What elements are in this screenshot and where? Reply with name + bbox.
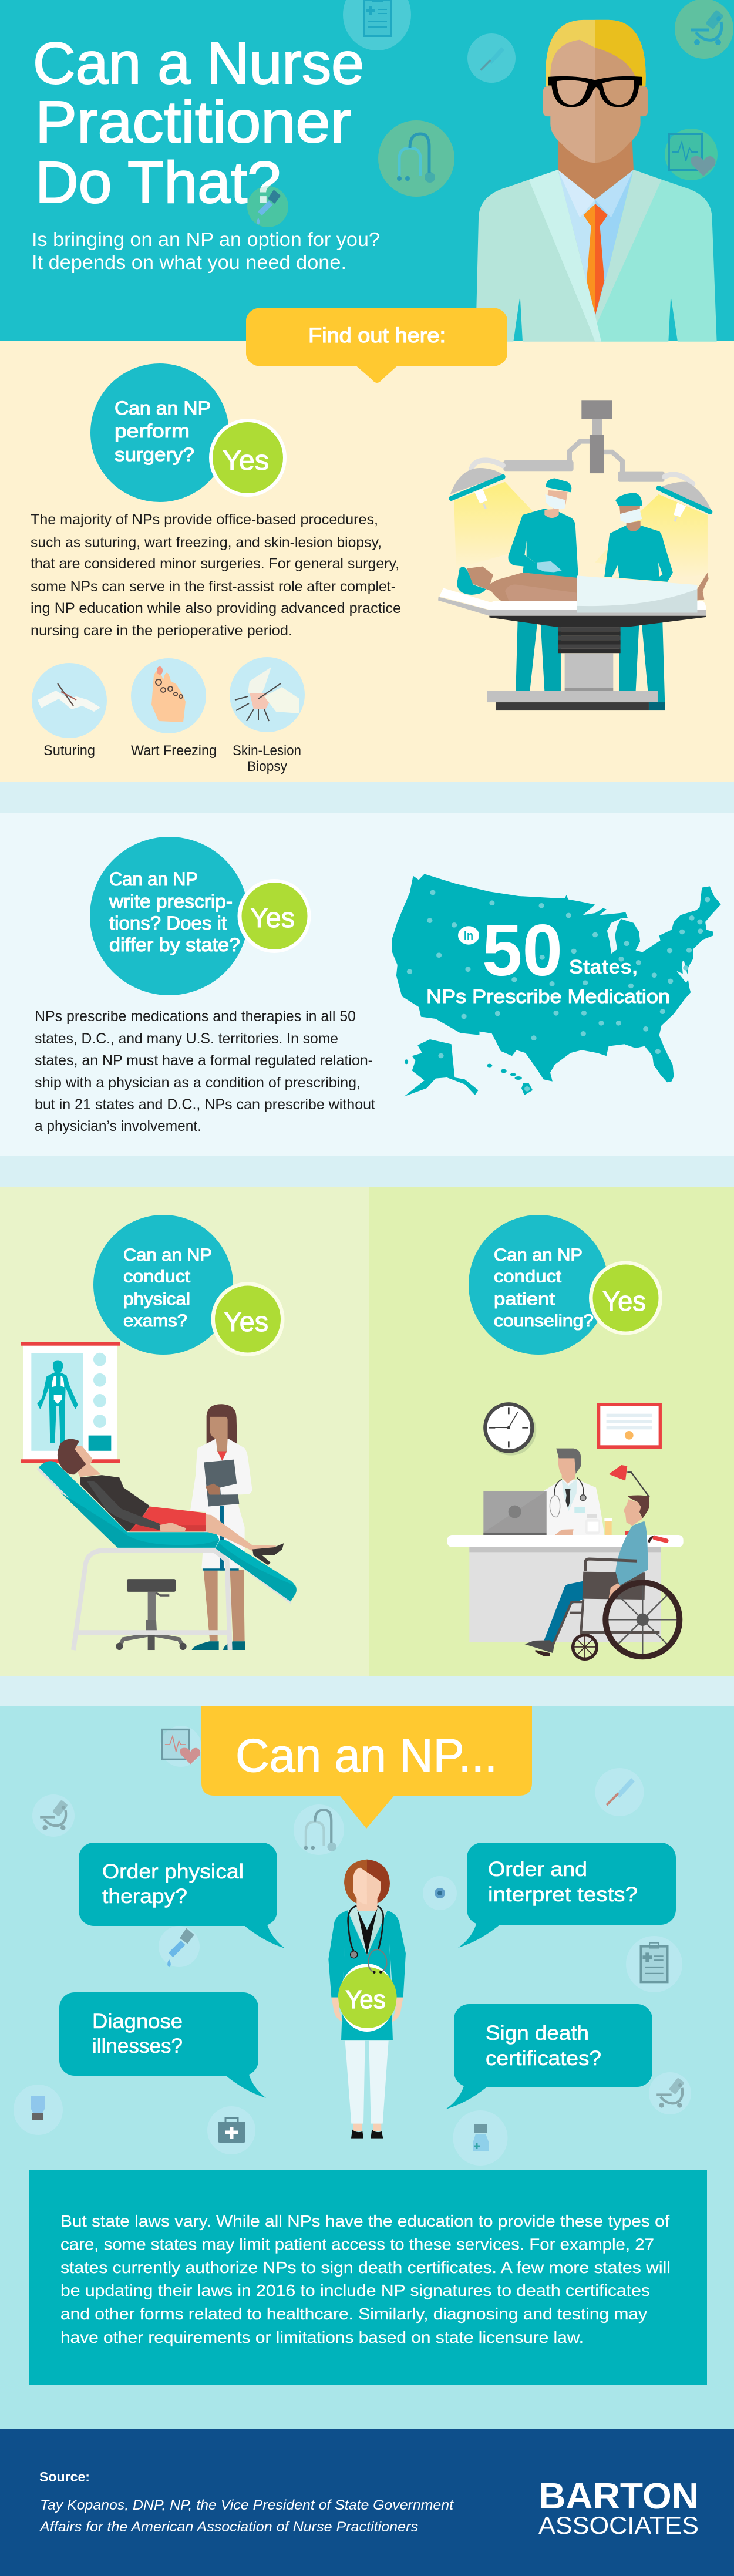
yes badge: Yes [223,445,269,476]
speech bubble: order and interpret tests: Order and [488,1858,587,1881]
surgery illustration [438,400,712,710]
desk [447,1535,684,1642]
hero floating icons [247,0,733,227]
nurse figure with yes sign [328,1860,406,2139]
icon: microscope [675,0,733,59]
pill bottles [585,1514,612,1535]
map text: in 50 states, NPs prescribe medication: 50 [482,910,563,991]
icon: eye [423,1876,457,1910]
speech bubble: order physical therapy: therapy? [102,1885,187,1908]
map text: in 50 states, NPs prescribe medication [426,910,670,1007]
background: counseling section right [369,1187,734,1676]
background: divider band two [0,1156,734,1187]
background: exam section left [0,1187,369,1676]
question badge: surgery: perform [115,420,190,442]
icon: monitor and heart [665,129,718,180]
banner: can an NP: Can an NP... [235,1729,497,1782]
text: prescriptions paragraph: ship with a physician as a condition of prescribing, [35,1075,361,1091]
text: prescriptions paragraph: a physician’s involvement. [35,1118,201,1134]
yes badge [211,1282,284,1356]
speech bubble: order physical therapy [79,1843,285,1948]
question badge: physical exams [93,1215,284,1356]
labels: procedures [43,743,301,775]
icon: microscope [32,1794,75,1837]
text: prescriptions paragraph [35,1008,375,1134]
yes badge [209,419,287,497]
counseling office illustration [447,1403,684,1659]
question badge: physical exams: exams? [123,1311,187,1331]
nurse figure with yes sign: Yes [345,1986,386,2014]
yes badge [237,879,311,953]
title [33,31,364,215]
title: Do That? [35,150,281,215]
panel: state laws vary: care, some states may limit patient access to these services. For example, 27 [60,2235,654,2254]
speech bubble: order physical therapy: Order physical [102,1860,244,1883]
background: divider band one [0,782,734,813]
source citation [39,2469,454,2535]
title: Can a Nurse [33,31,364,96]
icon: dropper [159,1926,200,1967]
speech bubble: diagnose illnesses: Diagnose [92,2010,183,2033]
yes badge: Yes [224,1306,268,1337]
source citation: Tay Kopanos, DNP, NP, the Vice President of State Government [40,2497,454,2513]
text: prescriptions paragraph: states, an NP must have a formal regulated relation- [35,1052,373,1069]
stool [116,1579,187,1650]
text: surgery paragraph: such as suturing, wart freezing, and skin-lesion biopsy, [31,534,382,551]
yes badge: Yes [602,1285,646,1316]
question badge: prescriptions: differ by state? [109,934,240,955]
labels: procedures: Skin-Lesion [233,743,301,759]
reclining patient [58,1439,284,1565]
source citation: Affairs for the American Association of Nurse Practitioners [39,2519,418,2535]
panel: state laws vary: and other forms related to healthcare. Similarly, diagnosing and testing may [60,2305,647,2323]
callout: find out here [246,308,507,383]
question badge: patient counseling: counseling? [494,1311,594,1331]
wall clock [485,1404,536,1456]
speech bubble: diagnose illnesses [59,1992,266,2098]
text: prescriptions paragraph: NPs prescribe medications and therapies in all 50 [35,1008,356,1025]
icon: microscope [649,2072,691,2114]
icon: bottle [453,2110,507,2166]
text: surgery paragraph: nursing care in the perioperative period. [31,622,292,639]
patient in wheelchair [524,1495,679,1659]
anatomy poster [21,1342,120,1463]
map text: in 50 states, NPs prescribe medication: States, [569,956,638,978]
logo: Barton Associates: ASSOCIATES [538,2511,699,2539]
icon backdrop: dropper [247,186,288,227]
banner: can an NP [201,1706,532,1829]
icon: wart freezing [131,658,206,733]
question badge: prescriptions: tions? Does it [109,912,227,934]
map text: in 50 states, NPs prescribe medication: In [464,928,473,943]
labels: procedures: Biopsy [247,759,287,775]
subtitle [32,228,380,273]
background: prescription section [0,813,734,1156]
question badge: surgery [90,363,287,502]
text: surgery paragraph: that are considered minor surgeries. For general surgery, [31,555,399,572]
icon: skin lesion biopsy [230,657,305,732]
exam room illustration [21,1342,297,1650]
source citation: Source: [39,2469,90,2484]
icon: syringe [467,33,516,83]
question badge: surgery: Can an NP [115,398,211,419]
panel: state laws vary [29,2170,707,2385]
question badge: physical exams: physical [123,1289,190,1309]
icon: thermometer [595,1768,644,1816]
logo: Barton Associates [538,2476,699,2539]
exam chair [37,1461,297,1650]
hero man illustration [476,20,717,342]
question badge: patient counseling: Can an NP [494,1245,583,1265]
background: aqua section [0,1706,734,2429]
speech bubble: order and interpret tests: interpret tests? [488,1883,638,1906]
labels: procedures: Suturing [43,743,95,759]
icon: stethoscope [294,1804,344,1855]
text: surgery paragraph: some NPs can serve in the first-assist role after complet- [31,578,396,595]
diploma [597,1403,662,1449]
question badge: prescriptions [90,837,311,995]
text: prescriptions paragraph: but in 21 states and D.C., NPs can prescribe without [35,1096,375,1113]
panel: state laws vary: be updating their laws in 2016 to include NP signatures to death certificates [60,2281,650,2299]
panel: state laws vary: states currently authorize NPs to sign death certificates. A few more states will [60,2258,671,2277]
text: surgery paragraph: ing NP education while also providing advanced practice [31,600,401,617]
speech bubble: sign death certificates [446,2004,652,2109]
subtitle: It depends on what you need done. [32,251,346,273]
text: prescriptions paragraph: states, D.C., and many U.S. territories. In some [35,1031,338,1047]
section four floating icons [14,1726,691,2166]
icon: dropper over title [247,186,288,227]
icon: clipboard [626,1936,682,1992]
background: navy footer [0,2429,734,2576]
question badge: surgery: surgery? [115,444,194,465]
question badge: prescriptions: Can an NP [109,868,198,890]
panel: state laws vary: have other requirements or limitations based on state licensure law. [60,2328,584,2346]
text: surgery paragraph: The majority of NPs provide office-based procedures, [31,511,378,528]
question badge: physical exams: conduct [123,1267,191,1286]
labels: procedures: Wart Freezing [131,743,217,759]
speech bubble: order and interpret tests [458,1843,676,1948]
nurse with clipboard [190,1404,252,1650]
yes badge: Yes [250,902,295,933]
subtitle: Is bringing on an NP an option for you? [32,228,380,250]
icon: monitor [160,1726,201,1767]
callout: find out here: Find out here: [308,324,446,347]
laptop [483,1491,547,1535]
icon: stethoscope [378,120,454,197]
question badge: patient counseling: patient [494,1289,555,1309]
desk lamp [609,1465,649,1536]
background: divider band three [0,1676,734,1706]
doctor at desk [544,1449,604,1535]
map text: in 50 states, NPs prescribe medication: NPs Prescribe Medication [426,986,670,1007]
question badge: prescriptions: write prescrip- [109,891,233,912]
speech bubble: sign death certificates: Sign death [486,2022,589,2045]
panel: state laws vary: But state laws vary. While all NPs have the education to provide these types of [60,2212,669,2230]
US map [392,874,721,1096]
icon: clipboard [343,0,411,50]
background: hero teal [0,0,734,341]
icon: first aid kit [207,2106,255,2154]
question badge: patient counseling [469,1215,662,1355]
yes badge [589,1261,662,1335]
background: cream surgery section [0,341,734,782]
question badge: patient counseling: conduct [494,1267,562,1286]
icon: suturing [32,663,107,738]
text: surgery paragraph [31,511,401,639]
logo: Barton Associates: BARTON [538,2476,699,2517]
title: Practitioner [35,89,351,155]
map shape with state dots [392,874,721,1096]
speech bubble: diagnose illnesses: illnesses? [92,2035,183,2058]
icon: flask [14,2085,63,2135]
speech bubble: sign death certificates: certificates? [486,2047,601,2070]
question badge: physical exams: Can an NP [123,1245,212,1265]
